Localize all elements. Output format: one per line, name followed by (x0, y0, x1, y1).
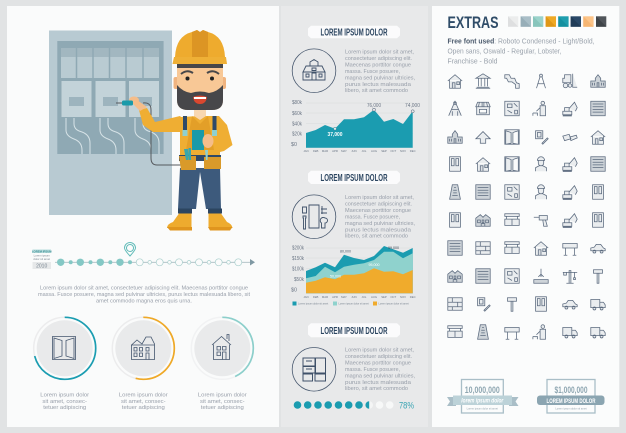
stacked area chart: MAR (322, 295, 328, 299)
dot progress 78%: 78% (399, 400, 414, 410)
stacked area chart: AUG (371, 295, 377, 299)
text block 1: libero, sit amet commodo (345, 88, 409, 94)
dot progress 78% (294, 400, 414, 410)
icon: excavator (563, 102, 577, 116)
text block 3: Lorem ipsum dolor sit amet, (345, 348, 414, 354)
belt (179, 155, 221, 161)
icon: car (563, 300, 577, 309)
stacked area chart: NOV (400, 295, 406, 299)
text block 2: consectetuer adipiscing elit. (345, 202, 412, 208)
icon: door (593, 185, 603, 199)
font note: Free font used: Roboto Condensed - Light/Bold, (448, 36, 594, 46)
paragraph (38, 286, 250, 304)
icon: heart house (591, 131, 605, 144)
icon: tower crane (563, 271, 577, 283)
text block 2: libero, sit amet commodo (345, 234, 409, 240)
hand (202, 134, 214, 148)
stacked area chart: $150k (292, 256, 304, 262)
text block 3: purus lectus malesuada (345, 380, 412, 386)
panel: extras (432, 6, 619, 427)
head (174, 77, 178, 89)
area chart 1: MAR (322, 149, 328, 153)
icon: shop (476, 102, 490, 115)
area chart 1: 37,000 (328, 132, 342, 138)
straps (183, 116, 216, 134)
icon: double doors (52, 336, 76, 360)
area chart 1: $20k (292, 132, 302, 138)
icon: location pin (124, 243, 136, 256)
jeans (178, 168, 221, 209)
text block 2 (345, 195, 415, 240)
timeline label: Lorem ipsum (34, 254, 50, 258)
icon: building badge (292, 49, 336, 92)
stacked area chart: JUL (362, 295, 367, 299)
timeline label: LOREM IPSUM (32, 249, 52, 253)
icon: apartment block (591, 101, 605, 116)
icon: worker (536, 185, 546, 199)
icon: mansion (131, 337, 154, 360)
icon: person with document (478, 298, 490, 311)
font note: Open sans, Oswald - Regular, Lobster, (448, 46, 562, 56)
text block 3: consectetuer adipiscing elit. (345, 354, 412, 360)
icon: cabinet badge (292, 348, 336, 391)
timeline (32, 243, 255, 270)
icon: shelves (448, 298, 462, 310)
area chart 1: AUG (371, 149, 377, 153)
icon: open window (505, 157, 519, 171)
text block 2: massa. Fusce posuere, (345, 214, 400, 220)
icon: kitchen (448, 326, 462, 337)
icon: bricks (476, 242, 490, 254)
badge: 10,000,000 (447, 380, 518, 413)
stacked area chart: 95,000 (368, 263, 380, 267)
circle: mansion (112, 317, 174, 411)
icon: block (448, 241, 462, 255)
text block 1: Maecenas porttitor congue (345, 62, 412, 68)
icon: manor (448, 271, 462, 282)
text block 2: Lorem ipsum dolor sit amet, (345, 195, 414, 201)
area chart 1: DEC (410, 149, 416, 153)
stacked area chart: FEB (313, 295, 319, 299)
text block 1: purus lectus malesuada (345, 82, 412, 88)
legend: Lorem ipsum dolor sit amet (338, 302, 369, 306)
paragraph: amet commodo magna eros quis urna. (96, 298, 192, 304)
caption: sit amet, consec- (42, 399, 87, 405)
icon: worker (536, 157, 546, 171)
heading 3: LOREM IPSUM DOLOR (320, 326, 388, 337)
colour swatches (508, 16, 606, 27)
icon: excavator (563, 158, 577, 171)
area chart 1: $60k (292, 111, 302, 117)
text block 3: magna sed pulvinar ultricies, (345, 373, 415, 379)
text block 1 (345, 50, 415, 94)
caption: Lorem ipsum dolor (198, 392, 247, 398)
text block 3: massa. Fusce posuere, (345, 367, 400, 373)
icon: tanker (591, 328, 605, 338)
icon: city (478, 325, 488, 339)
icon: bank (476, 74, 490, 88)
caption: sit amet, consec- (121, 399, 166, 405)
stacked area chart: DEC (410, 295, 416, 299)
heading 2: LOREM IPSUM DOLOR (320, 173, 388, 184)
cable (143, 103, 194, 165)
stacked area chart: JUN (351, 295, 357, 299)
helmet (175, 30, 225, 57)
icon: rollers (563, 134, 577, 141)
area chart 1: $0 (291, 142, 297, 148)
icon: pylon (449, 101, 461, 116)
heading 3 (308, 323, 400, 337)
boots (167, 214, 192, 228)
icon: house (212, 334, 231, 360)
area chart 1: 74,000 (405, 103, 420, 109)
icon: office (476, 185, 490, 199)
icon: hammer (594, 270, 602, 283)
icon: mansion (476, 215, 490, 226)
font note: Franchise - Bold (448, 56, 498, 65)
stacked area chart: APR (332, 295, 338, 299)
caption (198, 392, 247, 411)
icon: crane hook (534, 269, 548, 283)
text block 3: Maecenas porttitor congue (345, 360, 412, 366)
icon: van (563, 328, 577, 338)
heading 1 (308, 26, 400, 38)
caption: tetuer adipiscing (43, 405, 86, 411)
badge: 10,000,000: lorem ipsum dolor (461, 398, 504, 404)
stacked area chart: $0 (291, 288, 297, 294)
timeline label: dolor sit amet (33, 257, 50, 261)
stacked area chart: 80,000 (340, 250, 351, 254)
paragraph: Lorem ipsum dolor sit amet, consectetuer adipiscing elit. Maecenas porttitor congue (40, 286, 249, 292)
area chart 1: $80k (292, 100, 302, 106)
stacked area chart: SEP (381, 295, 387, 299)
icon: house with turbine (448, 75, 462, 88)
badge: $1,000,000: LOREM IPSUM DOLOR (546, 398, 596, 405)
legend: Lorem ipsum dolor sit amet (378, 302, 409, 306)
icon: seated person (533, 325, 546, 339)
badge: 10,000,000: 10,000,000 (465, 385, 500, 395)
icon: column (536, 297, 546, 311)
icon: truck (591, 300, 605, 310)
badge: $1,000,000: Lorem ipsum dolor sit amet (555, 406, 587, 410)
icon: interior items (593, 213, 603, 227)
area chart 1: APR (332, 149, 338, 153)
text block 3: libero, sit amet commodo (345, 386, 409, 392)
caption: tetuer adipiscing (122, 405, 165, 411)
text block 1: consectetuer adipiscing elit. (345, 56, 412, 62)
stacked area chart (291, 246, 416, 306)
caption (40, 392, 89, 411)
badge: $1,000,000: $1,000,000 (554, 385, 588, 395)
icon: plan sheet (505, 269, 519, 283)
area chart 1: NOV (400, 149, 406, 153)
area chart 1: MAY (341, 149, 347, 153)
icon grid (448, 74, 605, 339)
caption: sit amet, consec- (200, 399, 245, 405)
icon: school (591, 75, 605, 87)
icon: blueprint (505, 101, 519, 116)
badge: $1,000,000 (537, 380, 604, 413)
stacked area chart: OCT (390, 295, 397, 299)
icon: arched door (450, 213, 460, 227)
icon: house (476, 158, 490, 171)
area chart 1 (291, 100, 420, 153)
area chart 1: JUL (362, 149, 367, 153)
caption (119, 392, 168, 411)
area chart 1: FEB (313, 149, 319, 153)
icon: sign and pencil (536, 131, 548, 144)
text block 1: Lorem ipsum dolor sit amet, (345, 50, 414, 56)
text block 2: Maecenas porttitor congue (345, 208, 412, 214)
icon: furniture (505, 214, 519, 225)
icon: shop front (476, 269, 490, 283)
icon: tall door (450, 157, 460, 171)
text block 2: magna sed pulvinar ultricies, (345, 221, 415, 227)
circle: house (191, 317, 253, 411)
icon: buildings (591, 157, 605, 171)
illustration: electrician (116, 30, 232, 230)
area chart 1: JUN (351, 149, 357, 153)
text block 1: magna sed pulvinar ultricies, (345, 75, 415, 81)
panel: middle (281, 6, 428, 427)
icon: wrecking excavator (563, 186, 577, 199)
probe (122, 100, 133, 106)
icon: small building (448, 131, 462, 143)
text block 2: purus lectus malesuada (345, 227, 412, 233)
stacked area chart: JAN (303, 295, 309, 299)
neck (194, 108, 206, 120)
icon: barrier (563, 244, 577, 255)
area chart 1: $40k (292, 122, 302, 128)
icon: pipes (505, 75, 519, 88)
area chart 1: 76,000 (367, 103, 381, 109)
icon: doors badge (292, 195, 336, 238)
text block 3 (345, 348, 415, 392)
panel: left (7, 6, 279, 427)
font note (448, 36, 594, 65)
icon: sofa (505, 242, 519, 253)
icon: paint brush (508, 298, 516, 311)
icon: house with tools (534, 242, 548, 255)
caption: Lorem ipsum dolor (119, 392, 168, 398)
legend: Lorem ipsum dolor sit amet (298, 302, 328, 306)
stacked area chart: $100k (292, 266, 304, 272)
icon: roof arrow (476, 132, 490, 143)
meter (192, 130, 204, 150)
stacked area chart: MAY (341, 295, 347, 299)
timeline label (32, 249, 52, 270)
paragraph: massa. Fusce posuere, magna sed pulvinar ultricies, purus lectus malesuada libero, sit (38, 292, 250, 298)
icon: compass (536, 74, 546, 88)
electrical cabinet (49, 30, 172, 215)
stacked area chart: 50,000 (330, 274, 341, 278)
area chart 1: OCT (390, 149, 397, 153)
heading 2 (308, 171, 400, 184)
circle: doors (34, 317, 96, 411)
caption: Lorem ipsum dolor (40, 392, 89, 398)
caption: tetuer adipiscing (201, 405, 244, 411)
timeline label: 2010 (36, 264, 47, 270)
text block 1: massa. Fusce posuere, (345, 69, 400, 75)
heading 1: LOREM IPSUM DOLOR (320, 28, 388, 38)
icon: person with dog (533, 101, 546, 116)
legend (292, 302, 409, 306)
icon: desk (505, 328, 519, 339)
stacked area chart: $50k (294, 277, 304, 283)
badge: 10,000,000: Lorem ipsum dolor sit amet (467, 406, 498, 410)
icon: forklift (563, 74, 577, 88)
area chart 1: SEP (381, 149, 387, 153)
icon: cabinet (505, 185, 519, 199)
icon: drill (534, 216, 547, 226)
icon: double door (505, 130, 519, 144)
area chart 1: JAN (303, 149, 309, 153)
stacked area chart: $200k (292, 246, 304, 252)
stacked area chart: 99,000 (388, 246, 399, 250)
icon: skyscraper (450, 185, 460, 199)
jacket (139, 108, 232, 160)
icon: wheelbarrow (591, 244, 605, 253)
heading: extras: EXTRAS (448, 13, 498, 32)
icon: crane truck (563, 214, 577, 227)
